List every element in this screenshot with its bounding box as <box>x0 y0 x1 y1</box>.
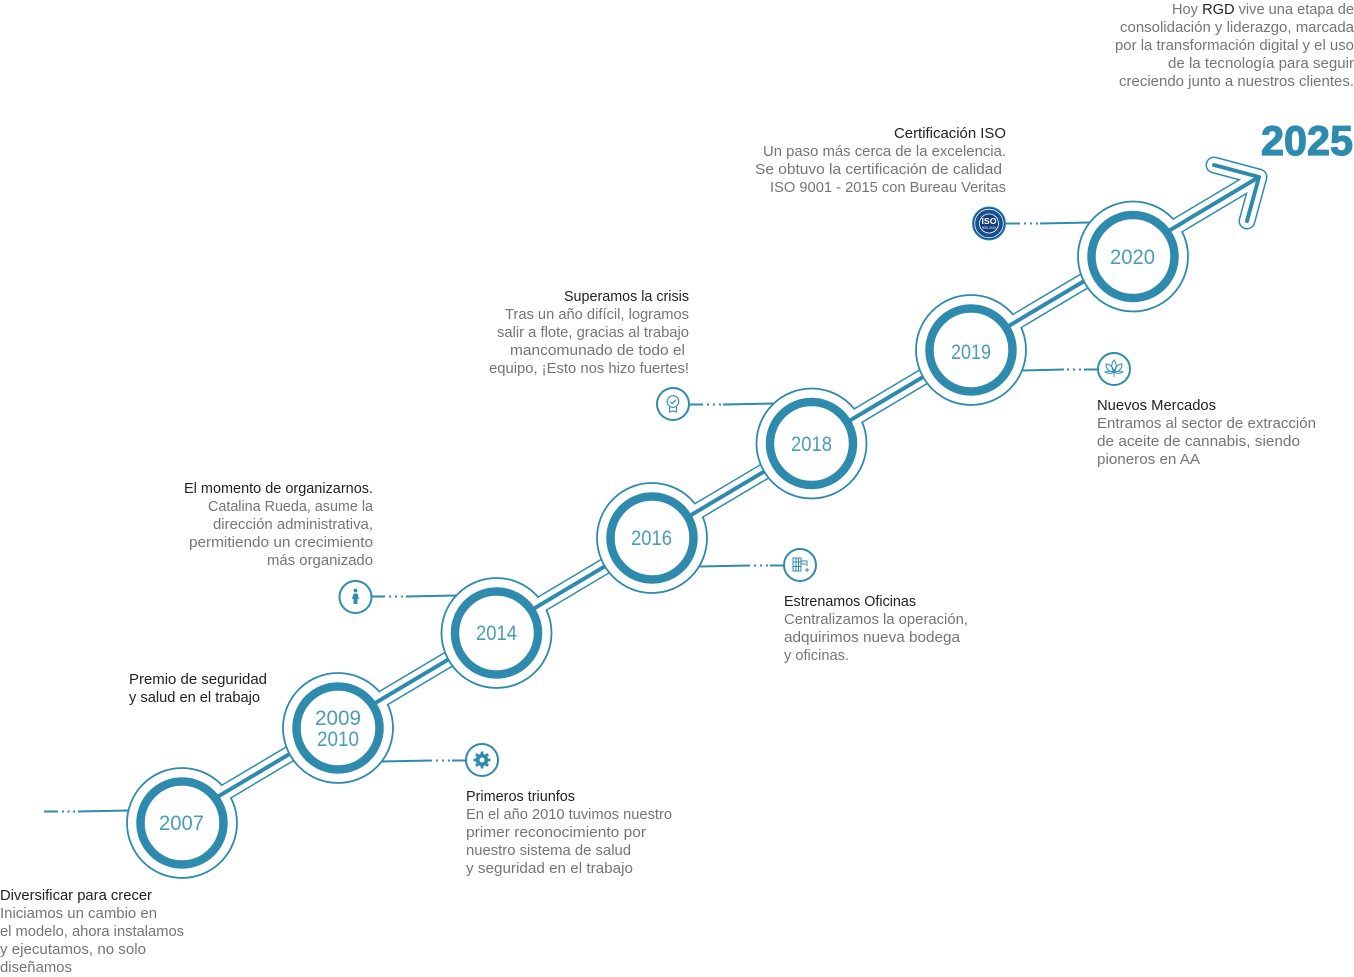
text: Superamos la crisis: Tras un año difícil, logramos <box>505 307 689 323</box>
text: Diversificar para crecer <box>0 888 184 976</box>
text: Estrenamos Oficinas <box>784 594 968 664</box>
text: Premio de seguridad: y salud en el trabajo <box>129 690 260 706</box>
text: Estrenamos Oficinas: Estrenamos Oficinas <box>784 594 916 610</box>
text: Diversificar para crecer: y ejecutamos, no solo <box>0 942 146 958</box>
text: intro 2025: creciendo junto a nuestros clientes. <box>1119 74 1354 90</box>
text: Primeros triunfos: primer reconocimiento por <box>466 825 646 841</box>
milestone: 2014 <box>442 578 552 688</box>
text: El momento de organizarnos: permitiendo un crecimiento <box>189 535 373 551</box>
text: intro 2025: por la transformación digital y el uso <box>1115 38 1354 54</box>
text: Superamos la crisis: Superamos la crisis <box>564 289 689 305</box>
connector: 2020 <box>1006 222 1090 224</box>
text: El momento de organizarnos: Catalina Rueda, asume la <box>208 499 374 515</box>
milestone: 2019 <box>916 295 1026 405</box>
text: Primeros triunfos: Primeros triunfos <box>466 789 575 805</box>
text: Diversificar para crecer: Iniciamos un cambio en <box>0 906 157 922</box>
text: Diversificar para crecer: el modelo, ahora instalamos <box>0 924 184 940</box>
text: Certificación ISO: Certificación ISO <box>894 126 1006 142</box>
text: El momento de organizarnos: dirección administrativa, <box>213 517 373 533</box>
icon: person <box>340 581 372 613</box>
milestone: 2009-2010: 2009 <box>315 706 361 730</box>
connector: 2014 <box>371 596 456 597</box>
text: Premio de seguridad: Premio de seguridad <box>129 672 267 688</box>
text: Superamos la crisis <box>489 289 689 377</box>
text: Superamos la crisis: salir a flote, gracias al trabajo <box>497 325 689 341</box>
timeline arrow <box>182 165 1259 818</box>
milestone: 2020: 2020 <box>1110 245 1155 269</box>
milestone: 2014: 2014 <box>476 621 517 645</box>
text: intro 2025: consolidación y liderazgo, marcada <box>1120 20 1354 36</box>
text: Diversificar para crecer: diseñamos <box>0 960 72 976</box>
text: Nuevos Mercados: Nuevos Mercados <box>1097 398 1216 414</box>
text: intro 2025 <box>1115 2 1354 90</box>
text: Certificación ISO: Un paso más cerca de la excelencia. <box>763 144 1006 160</box>
text: Nuevos Mercados <box>1097 398 1316 468</box>
text: Estrenamos Oficinas: y oficinas. <box>784 648 849 664</box>
icon: gear <box>466 744 498 776</box>
text: Certificación ISO: ISO 9001 - 2015 con Bureau Veritas <box>770 180 1006 196</box>
milestone: 2019: 2019 <box>951 340 991 364</box>
icon: building <box>784 549 816 581</box>
connector: 2007 <box>44 810 128 812</box>
text: Primeros triunfos: nuestro sistema de salud <box>466 843 631 859</box>
text: Estrenamos Oficinas: Centralizamos la operación, <box>784 612 968 628</box>
milestone: 2007: 2007 <box>159 811 204 835</box>
milestone: 2016: 2016 <box>631 526 672 550</box>
milestone: 2007 <box>127 768 237 878</box>
text: intro 2025: Hoy RGD vive una etapa de <box>1172 2 1354 18</box>
text: Nuevos Mercados: Entramos al sector de extracción <box>1097 416 1316 432</box>
heading: 2025: 2025 <box>1261 117 1353 164</box>
text: Primeros triunfos: y seguridad en el trabajo <box>466 861 633 877</box>
text: Diversificar para crecer: Diversificar para crecer <box>0 888 152 904</box>
connector: 2016 <box>699 566 784 567</box>
connector: 2009-2010 <box>381 760 466 762</box>
text: Superamos la crisis: equipo, ¡Esto nos hizo fuertes! <box>489 361 689 377</box>
text: Primeros triunfos <box>466 789 672 877</box>
text: intro 2025: de la tecnología para seguir <box>1168 56 1354 72</box>
text: El momento de organizarnos: El momento de organizarnos. <box>184 481 373 497</box>
milestone: 2016 <box>597 483 707 593</box>
icon: cannabis leaf <box>1098 353 1130 385</box>
milestone: 2009-2010: 2010 <box>317 727 359 751</box>
connector: 2018 <box>689 404 775 405</box>
text: Nuevos Mercados: de aceite de cannabis, siendo <box>1097 434 1300 450</box>
text: Certificación ISO: Se obtuvo la certificación de calidad <box>755 162 1002 178</box>
icon: badge <box>657 388 689 420</box>
connector: 2019 <box>1023 370 1098 371</box>
text: Estrenamos Oficinas: adquirimos nueva bodega <box>784 630 961 646</box>
text: Premio de seguridad <box>129 672 267 706</box>
text: Superamos la crisis: mancomunado de todo el <box>510 343 685 359</box>
milestone: 2009-2010 <box>283 673 393 783</box>
icon: ISO seal: 9001:2015 <box>982 225 997 230</box>
text: Primeros triunfos: En el año 2010 tuvimos nuestro <box>466 807 672 823</box>
icon: ISO seal: ISO <box>982 216 997 226</box>
milestone: 2020 <box>1078 202 1188 312</box>
text: El momento de organizarnos: más organizado <box>267 553 373 569</box>
milestone: 2018: 2018 <box>791 432 832 456</box>
text: El momento de organizarnos <box>184 481 374 569</box>
milestone: 2018 <box>756 388 866 498</box>
icon: ISO seal <box>972 207 1006 240</box>
text: Nuevos Mercados: pioneros en AA <box>1097 452 1200 468</box>
text: Certificación ISO <box>755 126 1006 196</box>
